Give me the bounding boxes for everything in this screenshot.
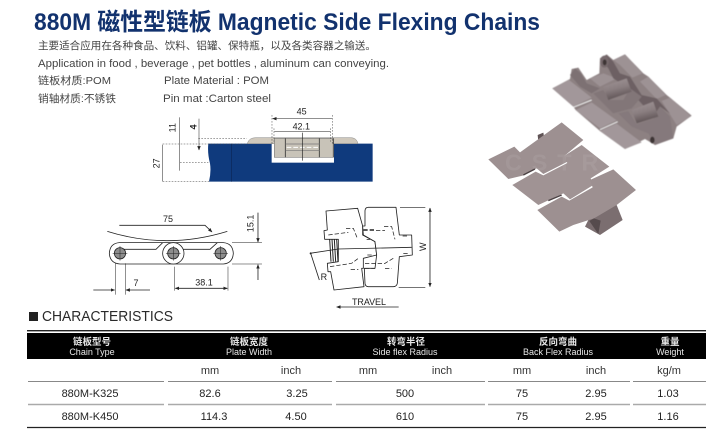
table row: 880M-K325 [62, 388, 679, 400]
rollers [603, 78, 632, 100]
table header [27, 330, 706, 359]
dimension labels: 42.1 [293, 121, 310, 131]
photo: chain links [488, 54, 692, 235]
table units row: inch [432, 365, 452, 377]
dimension labels: 38.1 [195, 277, 213, 287]
text block: application and materials: Application in food , beverage , pet bottles , aluminum can conveying. [38, 58, 389, 70]
table units row [201, 365, 681, 377]
travel arrow [337, 306, 399, 308]
table row: 880M-K450: 114.3 [201, 411, 227, 423]
dimension labels: 4 [188, 124, 198, 129]
title: 880M 磁性型链板 Magnetic Side Flexing Chains [34, 9, 540, 36]
text block: application and materials: Plate Material : POM [164, 75, 269, 87]
hidden lines [328, 227, 408, 269]
chain plate [247, 138, 358, 144]
table rules [27, 382, 706, 428]
diagram: cross-section on blue track [152, 107, 373, 182]
dimension labels: 75 [163, 214, 173, 224]
text block: application and materials: Pin mat :Carton steel [163, 93, 271, 105]
pin holes [600, 56, 609, 68]
table header: Side flex Radius [372, 347, 438, 357]
table: characteristics [27, 330, 706, 428]
table row: 880M-K450: 2.95 [585, 411, 607, 423]
table row: 880M-K450: 880M-K450 [62, 411, 118, 423]
table units row: mm [201, 365, 219, 377]
table row: 880M-K450: 4.50 [285, 411, 307, 423]
text block: application and materials [38, 39, 389, 105]
table row: 880M-K450: 1.16 [657, 411, 679, 423]
table row: 880M-K450: 75 [516, 411, 528, 423]
gaps between plates [573, 100, 618, 130]
labels: R [321, 272, 328, 282]
table units row: mm [359, 365, 377, 377]
table row: 880M-K325: 880M-K325 [62, 388, 118, 400]
diagram: top view with travel [310, 207, 430, 307]
pins [114, 248, 226, 259]
link arms [570, 68, 600, 93]
track slot [272, 144, 334, 163]
right plate [363, 207, 412, 287]
table row: 880M-K325: 2.95 [585, 388, 607, 400]
top chain underside [552, 54, 692, 149]
dimension labels [133, 214, 256, 288]
table header: 链板宽度 [230, 336, 268, 348]
pin links [330, 239, 338, 262]
table header: 重量 [660, 336, 680, 348]
left plate [324, 208, 377, 290]
dimension labels [152, 107, 310, 168]
dimension labels: 45 [297, 107, 307, 117]
dimension lines [115, 263, 228, 295]
dimension labels: 7 [133, 278, 138, 288]
table units row: inch [281, 365, 301, 377]
radius arc [107, 231, 227, 241]
table row: 880M-K325: 75 [516, 388, 528, 400]
table row: 880M-K325: 500 [396, 388, 414, 400]
table header: Chain Type [69, 347, 115, 357]
table units row: inch [586, 365, 606, 377]
diagram: side view with pitch [93, 213, 262, 295]
dimension labels: 27 [152, 158, 162, 168]
labels: W [418, 242, 428, 251]
center line [310, 247, 412, 253]
blue track [208, 144, 373, 182]
dimension labels: 11 [167, 123, 177, 132]
dimension labels: 15.1 [246, 215, 256, 232]
table header: Plate Width [226, 347, 272, 357]
section heading: CHARACTERISTICS [42, 309, 173, 325]
watermark: CSTR [505, 150, 598, 176]
table row: 880M-K325: 1.03 [657, 388, 679, 400]
table header: 转弯半径 [387, 336, 425, 348]
labels: TRAVEL [352, 297, 386, 307]
bottom chain top face [488, 122, 636, 235]
table header: Back Flex Radius [523, 347, 594, 357]
table header: 反向弯曲 [539, 336, 577, 348]
table row: 880M-K325: 3.25 [286, 388, 308, 400]
width dimension [399, 207, 425, 287]
table row: 880M-K450: 610 [396, 411, 414, 423]
table row: 880M-K325: 82.6 [199, 388, 221, 400]
text block: application and materials: 链板材质:POM [38, 74, 111, 87]
table units row: mm [513, 365, 531, 377]
text block: application and materials: 主要适合应用在各种食品、饮料、铝罐、保特瓶，以及各类容器之输送。 [38, 39, 376, 52]
text block: application and materials: 销轴材质:不锈铁 [38, 92, 117, 105]
table row: 880M-K450 [62, 411, 679, 423]
table header: Weight [656, 347, 684, 357]
chain link outline [109, 243, 233, 264]
table header: 链板型号 [73, 336, 111, 348]
labels [321, 242, 428, 307]
radius [311, 253, 319, 280]
table units row: kg/m [657, 365, 681, 377]
dimension lines [163, 115, 332, 182]
